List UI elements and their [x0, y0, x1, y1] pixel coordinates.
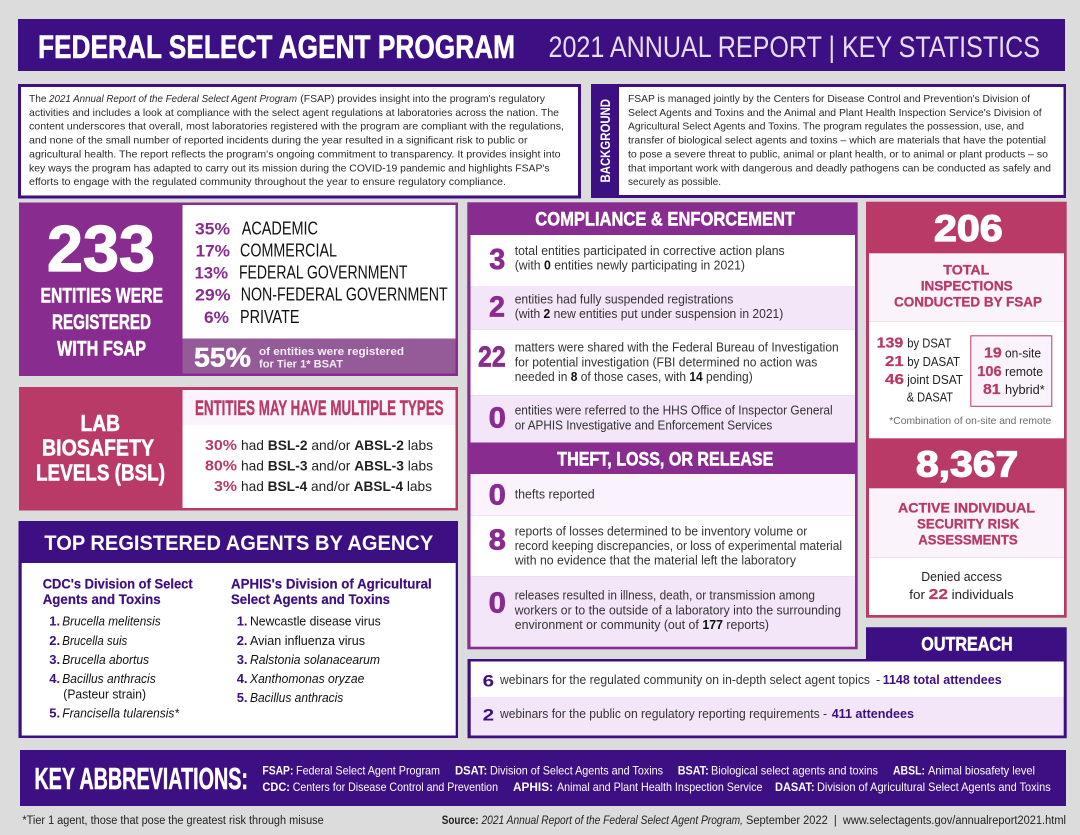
suspended registrations [489, 291, 783, 323]
theft heading: THEFT, LOSS, OR RELEASE [557, 449, 773, 470]
abbreviation definitions: Federal Select Agent Program [296, 764, 440, 778]
thefts: thefts reported [515, 488, 595, 502]
thefts [489, 480, 595, 512]
APHIS list: 5. [237, 690, 248, 705]
CDC list: 3. [49, 652, 60, 667]
panel: introduction: (FSAP) provides insight into the program's regulatory [300, 93, 546, 105]
biosafety heading [36, 410, 165, 485]
denied access: for [909, 587, 926, 602]
panel: lab biosafety levels [19, 387, 458, 510]
webinars for public: 411 attendees [832, 707, 914, 721]
abbreviation definitions: FSAP: [262, 764, 293, 778]
abbreviation definitions: DASAT: [775, 780, 814, 794]
entities caption: ENTITIES WERE [40, 283, 163, 307]
panel: outreach [468, 627, 1067, 738]
biosafety statistics: 30% [205, 437, 237, 454]
CDC list: 1. [49, 614, 60, 629]
security risk heading: SECURITY RISK [917, 515, 1019, 531]
abbreviation definitions: Animal and Plant Health Inspection Service [557, 780, 763, 794]
suspended registrations: (with 2 new entities put under suspension in 2021) [515, 307, 783, 321]
big number 233: 233 [47, 212, 155, 285]
CDC list: 2. [49, 633, 60, 648]
CDC list: Agents and Toxins [43, 592, 161, 607]
releases: environment or community (out of 177 reports) [515, 618, 769, 632]
inspections by agency [877, 335, 963, 405]
biosafety statistics: 80% [205, 458, 237, 475]
entity type list: 6% [204, 309, 229, 327]
APHIS list: Ralstonia solanacearum [250, 652, 380, 667]
panel: background: that important work with dangerous and deadly pathogens can be conducted as safely and [628, 162, 1051, 174]
title banner [18, 19, 1065, 71]
inspections by mode box: hybrid* [1005, 382, 1045, 397]
CDC list [43, 576, 193, 721]
webinars for regulated community: webinars for the regulated community on in-depth select agent topics [499, 673, 870, 687]
inspections by agency: by DSAT [907, 336, 951, 351]
entity type list: ACADEMIC [242, 218, 318, 238]
entities caption: WITH FSAP [57, 337, 146, 361]
big number 8,367: 8,367 [916, 444, 1018, 485]
inspections by agency: 46 [885, 371, 904, 388]
denied access [909, 569, 1014, 603]
panel: background: to pose a severe threat to public, animal or plant health, or to animal or plant products – so [628, 148, 1048, 160]
FBI matters: for potential investigation (FBI determined no action was [515, 355, 817, 369]
CDC list: Bacillus anthracis [62, 671, 156, 686]
APHIS list [231, 576, 432, 705]
CDC list: 5. [49, 706, 60, 721]
APHIS list: 4. [237, 671, 248, 686]
releases [489, 588, 841, 632]
abbreviations heading: KEY ABBREVIATIONS: [34, 761, 248, 796]
OIG referrals: 0 [489, 403, 506, 435]
inspections by mode box: remote [1005, 364, 1043, 379]
outreach heading: OUTREACH [921, 635, 1013, 656]
entity type list: 29% [195, 286, 231, 304]
biosafety statistics [205, 437, 433, 495]
webinars for public: webinars for the public on regulatory reporting requirements - [499, 707, 827, 721]
CDC list: 4. [49, 671, 60, 686]
APHIS list: 1. [237, 614, 248, 629]
corrective action plans: total entities participated in corrective action plans [515, 244, 785, 258]
security risk heading: ASSESSMENTS [918, 531, 1018, 547]
webinars for public: 2 [483, 706, 494, 725]
inspections by mode box: 19 [984, 345, 1002, 362]
inspections heading: TOTAL [943, 261, 990, 277]
abbreviation definitions: Division of Select Agents and Toxins [490, 764, 663, 778]
inspections by agency: joint DSAT [906, 372, 963, 387]
compliance heading: COMPLIANCE & ENFORCEMENT [535, 210, 795, 231]
losses [489, 524, 842, 568]
abbreviation definitions: APHIS: [513, 780, 553, 794]
biosafety statistics: 3% [214, 478, 237, 495]
abbreviation definitions [262, 764, 1051, 794]
CDC list: Brucella abortus [62, 652, 149, 667]
webinars for public [483, 706, 914, 725]
webinars for regulated community: 6 [483, 672, 494, 691]
panel: background: securely as possible. [628, 176, 721, 188]
releases: releases resulted in illness, death, or transmission among [515, 589, 815, 603]
suspended registrations: entities had fully suspended registrations [515, 292, 733, 306]
releases: workers or to the outside of a laboratory into the surrounding [514, 603, 841, 617]
biosafety heading: BIOSAFETY [42, 435, 154, 461]
source line: Source: [442, 815, 479, 827]
panel: introduction: The [29, 93, 47, 105]
inspections by mode box: on-site [1005, 346, 1041, 361]
entity type list: 17% [196, 242, 230, 260]
panel: inspections and security risk assessments [866, 202, 1067, 618]
FBI matters: needed in 8 of those cases, with 14 pending) [515, 370, 753, 384]
inspections by agency: by DASAT [907, 354, 960, 369]
OIG referrals: entities were referred to the HHS Office of Inspector General [515, 404, 833, 418]
agents heading: TOP REGISTERED AGENTS BY AGENCY [44, 532, 433, 555]
inspections footnote: *Combination of on-site and remote [889, 415, 1051, 427]
CDC list: Brucella melitensis [62, 614, 161, 629]
entity type list: 35% [195, 220, 230, 238]
biosafety heading: LEVELS (BSL) [36, 459, 165, 485]
panel: key abbreviations [20, 750, 1066, 806]
tier 1 callout: for Tier 1* BSAT [259, 358, 343, 370]
inspections by mode box [971, 336, 1052, 406]
inspections by agency: 139 [877, 335, 903, 352]
FBI matters: matters were shared with the Federal Bureau of Investigation [515, 341, 839, 355]
losses: 8 [489, 524, 506, 556]
panel: background: FSAP is managed jointly by the Centers for Disease Control and Prevention's Division of [628, 93, 1030, 105]
entities caption: REGISTERED [52, 310, 151, 334]
thefts: 0 [489, 480, 506, 512]
biosafety statistics: had BSL-4 and/or ABSL-4 labs [241, 478, 432, 494]
APHIS list: 3. [237, 652, 248, 667]
APHIS list: Bacillus anthracis [250, 690, 344, 705]
abbreviation definitions: BSAT: [678, 764, 709, 778]
abbreviation definitions: ABSL: [893, 764, 925, 778]
panel: background: Select Agents and Toxins and the Animal and Plant Health Inspection Service's Division of [628, 107, 1042, 119]
webinars for regulated community: 1148 total attendees [883, 673, 1002, 687]
big number 206: 206 [934, 208, 1003, 249]
biosafety statistics: had BSL-2 and/or ABSL-2 labs [241, 437, 433, 453]
panel: introduction [20, 86, 580, 197]
APHIS list: 2. [237, 633, 248, 648]
source line: September 2022 | www.selectagents.gov/annualreport2021.html [746, 815, 1066, 827]
tier 1 callout [194, 343, 404, 373]
CDC list: Brucella suis [62, 633, 128, 648]
source line: 2021 Annual Report of the Federal Select Agent Program, [481, 815, 743, 827]
OIG referrals: or APHIS Investigative and Enforcement Services [515, 418, 772, 432]
FBI matters [478, 341, 839, 384]
abbreviation definitions: CDC: [262, 780, 290, 794]
panel: introduction: agricultural health. The report reflects the program's ongoing commitment to transparency. It provides insight into [29, 148, 561, 160]
panel: introduction: activities and includes a look at compliance with the select agent regulations at laboratories across the nation. The [29, 107, 559, 119]
panel: background: transfer of biological select agents and toxins – which are materials that have the potential [628, 135, 1046, 147]
panel: background [591, 84, 1066, 198]
APHIS list: Select Agents and Toxins [231, 592, 390, 607]
entity type list: 13% [194, 264, 228, 282]
FBI matters: 22 [478, 341, 506, 373]
panel: introduction: content underscores that overall, most laboratories registered with the program are compliant with the regulations, [29, 121, 564, 133]
entities caption [40, 283, 163, 361]
denied access: individuals [952, 587, 1014, 602]
denied access: Denied access [921, 569, 1002, 584]
abbreviation definitions: Centers for Disease Control and Prevention [293, 780, 498, 794]
inspections by mode box: 106 [977, 363, 1002, 380]
webinars for regulated community [483, 672, 1002, 691]
corrective action plans: 3 [489, 244, 505, 276]
abbreviation definitions: Division of Agricultural Select Agents and Toxins [817, 780, 1051, 794]
entity type list [194, 218, 448, 327]
losses: record keeping discrepancies, or loss of experimental material [515, 539, 842, 553]
tier 1 callout: 55% [194, 343, 251, 373]
corrective action plans: (with 0 entities newly participating in 2021) [515, 259, 745, 273]
inspections by agency: & DASAT [907, 390, 953, 405]
OIG referrals [489, 403, 833, 435]
panel: top registered agents [18, 521, 458, 738]
security risk heading: ACTIVE INDIVIDUAL [898, 499, 1035, 515]
panel: introduction: and none of the small number of reported incidents during the year resulted in a significant risk to public or [29, 135, 528, 147]
inspections heading: CONDUCTED BY FSAP [894, 294, 1042, 310]
APHIS list: APHIS's Division of Agricultural [231, 576, 432, 591]
background label: BACKGROUND [598, 99, 613, 182]
entity type list: FEDERAL GOVERNMENT [239, 262, 408, 282]
multiple types heading: ENTITIES MAY HAVE MULTIPLE TYPES [195, 397, 444, 420]
panel: introduction: efforts to engage with the regulated community throughout the year to ensure regulatory compliance. [29, 176, 506, 188]
entity type list: COMMERCIAL [240, 240, 337, 260]
losses: with no evidence that the material left the laboratory [514, 554, 797, 568]
suspended registrations: 2 [489, 291, 505, 323]
abbreviation definitions: DSAT: [455, 764, 487, 778]
panel: registered entities [19, 202, 458, 376]
entity type list: NON-FEDERAL GOVERNMENT [241, 284, 448, 304]
title: FEDERAL SELECT AGENT PROGRAM [38, 29, 515, 65]
CDC list: CDC's Division of Select [43, 576, 193, 591]
corrective action plans [489, 244, 785, 276]
denied access: 22 [929, 586, 948, 603]
inspections by mode box: 81 [983, 381, 1000, 398]
source line [442, 815, 1066, 827]
losses: reports of losses determined to be inventory volume or [515, 524, 807, 538]
panel: introduction: 2021 Annual Report of the Federal Select Agent Program [48, 93, 297, 105]
APHIS list: Xanthomonas oryzae [249, 671, 364, 686]
releases: 0 [489, 588, 506, 620]
panel: introduction: key ways the program has adapted to carry out its mission during the COVID-19 pandemic and highlights FSAP's [29, 162, 550, 174]
CDC list: (Pasteur strain) [63, 687, 146, 702]
tier 1 callout: of entities were registered [259, 346, 404, 358]
entity type list: PRIVATE [240, 307, 300, 327]
APHIS list: Avian influenza virus [250, 633, 365, 648]
security risk heading [898, 499, 1035, 547]
panel: background: Agricultural Select Agents and Toxins. The program regulates the possession, use, and [628, 121, 1024, 133]
inspections heading [894, 261, 1042, 310]
APHIS list: Newcastle disease virus [250, 614, 381, 629]
abbreviation definitions: Biological select agents and toxins [711, 764, 878, 778]
webinars for regulated community: - [876, 673, 880, 687]
biosafety heading: LAB [80, 410, 120, 436]
abbreviation definitions: Animal biosafety level [928, 764, 1035, 778]
CDC list: Francisella tularensis* [62, 706, 180, 721]
footnote: *Tier 1 agent, those that pose the greatest risk through misuse [22, 815, 324, 827]
panel: compliance and enforcement, theft loss release [467, 202, 858, 649]
biosafety statistics: had BSL-3 and/or ABSL-3 labs [241, 458, 433, 474]
inspections by agency: 21 [885, 353, 904, 370]
inspections heading: INSPECTIONS [921, 278, 1013, 294]
